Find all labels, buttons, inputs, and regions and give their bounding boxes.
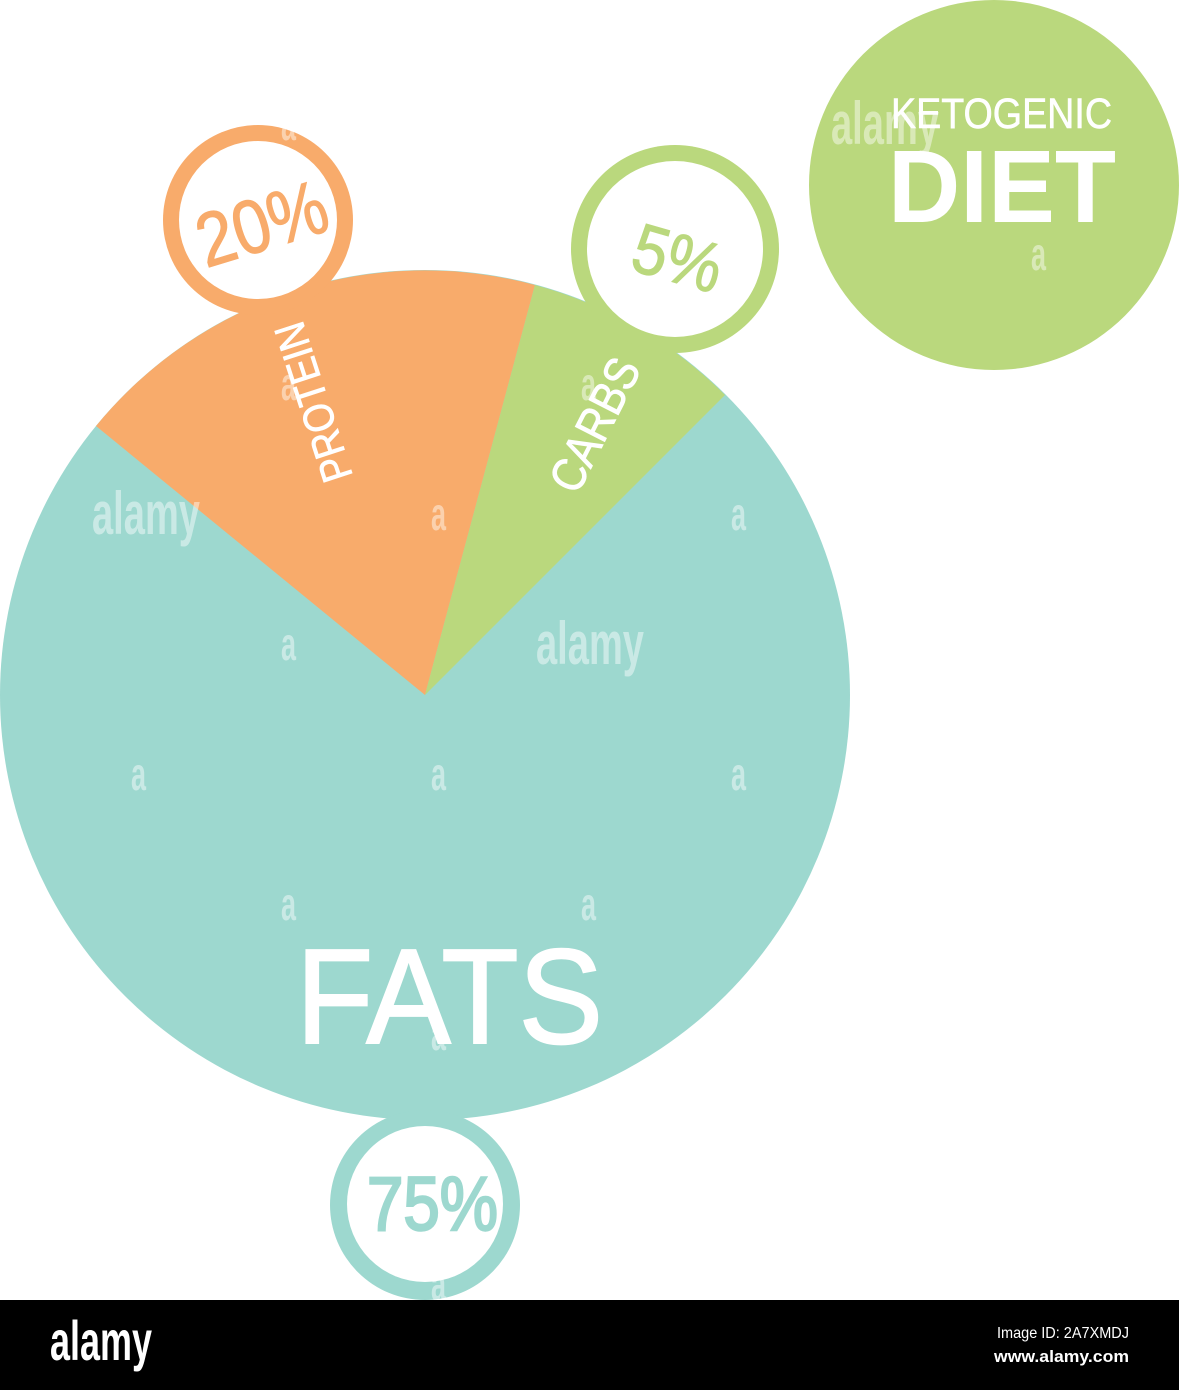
badge: fats 75%: 75% — [367, 1162, 498, 1247]
watermarks: a — [131, 748, 146, 800]
footer bar: alamy — [50, 1309, 152, 1372]
badge: fats 75% — [330, 1110, 520, 1300]
footer bar — [0, 1300, 1179, 1390]
watermarks: alamy — [92, 480, 200, 547]
title badge: ketogenic diet — [809, 0, 1179, 370]
watermarks — [92, 90, 1046, 1310]
watermarks: a — [281, 618, 296, 670]
watermarks: a — [431, 748, 446, 800]
footer bar: Image ID: 2A7XMDJ — [997, 1325, 1129, 1342]
label: protein: PROTEIN — [266, 316, 363, 488]
watermarks: a — [731, 488, 746, 540]
label: fats: FATS — [296, 921, 603, 1072]
watermarks: a — [281, 358, 296, 410]
title badge: ketogenic diet: KETOGENIC — [891, 90, 1112, 138]
watermarks: alamy — [536, 610, 644, 677]
watermarks: a — [731, 748, 746, 800]
watermarks: a — [581, 878, 596, 930]
watermarks: a — [281, 98, 296, 150]
badge: carbs 5%: 5% — [624, 208, 732, 308]
watermarks: a — [431, 1008, 446, 1060]
footer bar: www.alamy.com — [993, 1347, 1129, 1366]
watermarks: a — [581, 358, 596, 410]
watermarks: alamy — [831, 90, 939, 157]
title badge: ketogenic diet: DIET — [888, 129, 1116, 244]
watermarks: a — [1031, 228, 1046, 280]
label: carbs: CARBS — [540, 350, 652, 501]
badge: protein 20% — [163, 125, 353, 315]
badge: protein 20%: 20% — [186, 164, 338, 284]
watermarks: a — [431, 1258, 446, 1310]
watermarks: a — [281, 878, 296, 930]
pie chart: macronutrient split — [0, 270, 850, 1120]
watermarks: a — [431, 488, 446, 540]
badge: carbs 5% — [571, 145, 779, 353]
